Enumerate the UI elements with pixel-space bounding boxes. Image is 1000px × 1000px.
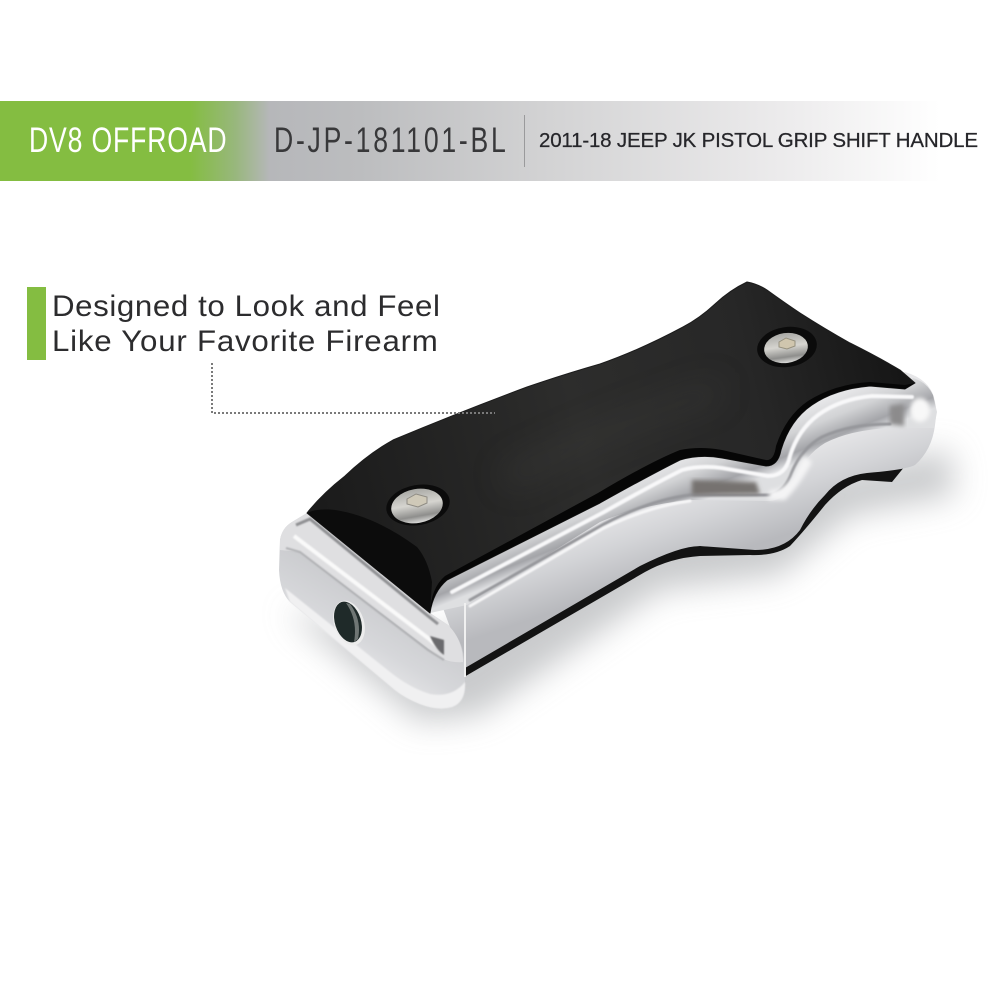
green accent bar — [27, 287, 46, 360]
grip soft highlight — [500, 380, 720, 490]
rim reflections — [692, 480, 760, 495]
feature callout text: Designed to Look and Feel — [52, 290, 440, 323]
side seam — [464, 603, 466, 677]
silver front end cap — [279, 513, 465, 708]
grip front bevel — [307, 509, 432, 613]
feature callout text — [52, 290, 440, 358]
black underside strip — [462, 466, 905, 677]
product: pistol grip shift handle — [279, 282, 937, 708]
end cap top chamfer — [280, 513, 463, 662]
feature callout text: Like Your Favorite Firearm — [52, 325, 438, 358]
screw near front — [383, 480, 453, 530]
dotted leader line — [212, 363, 495, 413]
rim highlights — [452, 396, 912, 606]
end cap hole — [328, 596, 370, 650]
header divider — [524, 115, 525, 167]
product shadow — [285, 450, 955, 722]
product title: 2011-18 JEEP JK PISTOL GRIP SHIFT HANDLE — [539, 129, 978, 152]
screw near back — [755, 323, 819, 371]
grip plate bevel edge — [430, 382, 915, 613]
brand name: DV8 OFFROAD — [29, 120, 227, 160]
silver body side — [440, 372, 936, 668]
end cap bottom highlight — [285, 588, 465, 708]
silver top rim — [430, 378, 937, 613]
part number: D-JP-181101-BL — [274, 120, 506, 160]
black grip plate — [307, 282, 915, 613]
header band — [0, 101, 1000, 181]
